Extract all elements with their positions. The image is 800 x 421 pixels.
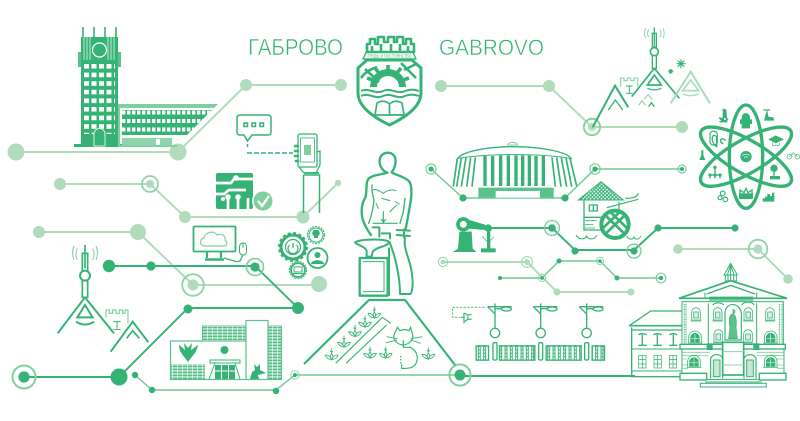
icon: robotic arm xyxy=(453,219,496,252)
icon: circuit chip with check mark xyxy=(216,173,274,212)
icon: hand holding phone xyxy=(295,134,320,213)
icon: chat bubble xyxy=(237,115,293,153)
connector network: light xyxy=(8,79,793,296)
icon: coat of arms of Gabrovo: ТРУДЪ И ПОСТОЯНСТВО xyxy=(368,54,412,59)
title: Latin: GABROVO xyxy=(439,35,544,60)
icon: computer with cloud and mouse xyxy=(194,226,246,262)
building: domed hall xyxy=(453,142,577,198)
building: house with plant ornament xyxy=(170,320,282,380)
building: historic palace with statue xyxy=(629,263,787,387)
icon: TV tower, mountains and fortress, right xyxy=(593,27,710,127)
icon: atom with industry and science symbols xyxy=(693,105,800,208)
icon: gears with power, bulb, person and laptop xyxy=(279,226,328,279)
icon: street lamps, fence and plug xyxy=(453,303,604,360)
connector network: dark xyxy=(12,164,739,394)
statue: blacksmith at the anvil xyxy=(355,153,413,296)
pedestal with plants and cat xyxy=(304,300,455,368)
building: tower and administrative wing xyxy=(74,27,218,147)
title: Bulgarian: ГАБРОВО xyxy=(248,34,343,60)
icon: coat of arms of Gabrovo xyxy=(358,37,421,125)
building: watermill xyxy=(576,182,641,239)
icon: TV tower and fortress, left xyxy=(58,245,148,352)
